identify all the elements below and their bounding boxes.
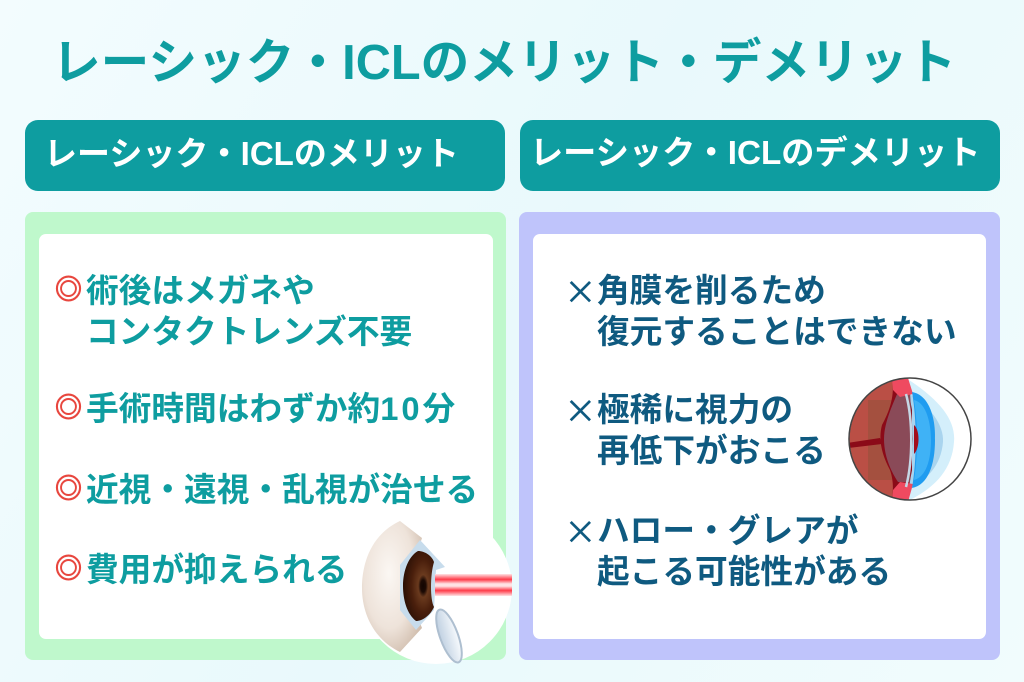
demerit 3: 起こる可能性がある: [597, 553, 891, 590]
panel: demerits: [519, 212, 1000, 660]
merit 1: [55, 272, 412, 350]
panel: merits inner card: [39, 234, 493, 639]
white circle background: [360, 512, 512, 664]
merit 4: ◎: [55, 554, 82, 584]
merit 1: コンタクトレンズ不要: [86, 313, 412, 350]
demerit 3: ×: [564, 507, 597, 554]
heading: merits: レーシック・ICLのメリット: [44, 135, 459, 172]
demerit 2: 極稀に視力の: [597, 391, 793, 428]
iris: [403, 551, 434, 621]
demerit 2: ×: [564, 386, 597, 433]
heading: demerits: [520, 120, 1000, 191]
merit 2: 手術時間はわずか約10分: [86, 390, 455, 427]
merit 3: 近視・遠視・乱視が治せる: [86, 471, 478, 508]
heading: merits: [25, 120, 505, 191]
corneal flap: [431, 607, 467, 665]
merit 3: ◎: [55, 474, 82, 504]
demerit 1: 角膜を削るため: [597, 272, 826, 309]
title: レーシック・ICLのメリット・デメリット: [52, 36, 956, 90]
merit 2: ◎: [55, 393, 82, 423]
demerit 1: ×: [564, 267, 597, 314]
demerit 2: 再低下がおこる: [597, 432, 826, 469]
demerit 3: [564, 507, 891, 590]
panel: demerits inner card: [533, 234, 986, 639]
demerit 1: [564, 267, 957, 350]
merit 4: 費用が抑えられる: [86, 551, 348, 588]
cornea: [400, 540, 445, 630]
demerit 1: 復元することはできない: [597, 313, 957, 350]
icon: eye with laser: [362, 521, 512, 664]
demerit 2: [564, 386, 826, 469]
panel: merits: [25, 212, 506, 660]
laser beam: [435, 574, 512, 596]
demerit 3: ハロー・グレアが: [597, 512, 858, 549]
merit 1: 術後はメガネや: [86, 272, 315, 309]
heading: demerits: レーシック・ICLのデメリット: [530, 135, 980, 172]
lens diagram: [850, 378, 954, 500]
eyeball: [362, 521, 422, 652]
merit 1: ◎: [55, 275, 82, 305]
icon: ICL lens cross-section: [848, 377, 972, 501]
